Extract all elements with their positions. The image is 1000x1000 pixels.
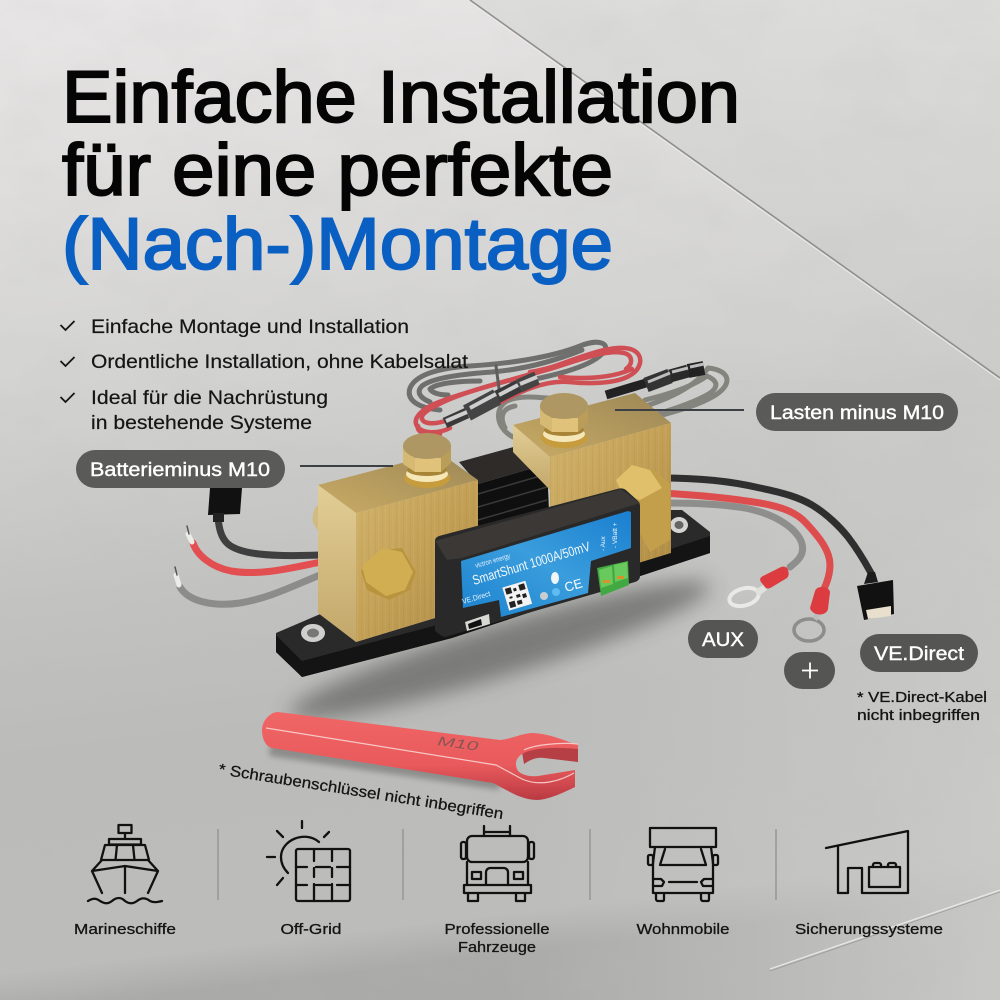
- hex bolt, front: [361, 548, 416, 600]
- terminal labels: - Aux: [600, 535, 607, 551]
- product name: SmartShunt 1000A/50mV: [471, 539, 592, 588]
- crimp ring terminals: [727, 567, 894, 641]
- label pill: plus: [784, 652, 835, 689]
- ring terminal: AUX: [727, 567, 789, 609]
- icon: Wohnmobile: [648, 828, 718, 901]
- label pill: Lasten minus M10: Lasten minus M10: [770, 403, 944, 424]
- SmartShunt housing: - VBatt +: [612, 522, 619, 548]
- blue label: [461, 511, 631, 617]
- item: Ideal für die Nachrüstung: Ideal für die Nachrüstung: [91, 387, 328, 409]
- hex bolt, right side: [616, 465, 670, 552]
- left VE.Direct plug: [208, 488, 242, 522]
- label pill: AUX: [688, 620, 758, 658]
- application icons: [88, 821, 908, 903]
- heat sink fins: [459, 443, 550, 555]
- footnote: VE.Direct cable: nicht inbegriffen: [857, 708, 980, 724]
- icon: Marineschiffe: [88, 825, 162, 903]
- application labels: Fahrzeuge: [458, 939, 536, 956]
- icon: Professionelle Fahrzeuge: [461, 826, 534, 901]
- application labels: Wohnmobile: [636, 921, 730, 938]
- divider: [775, 829, 777, 900]
- brass block right: [513, 393, 671, 590]
- bolt left: [403, 433, 451, 488]
- icon: Off-Grid: [267, 821, 350, 901]
- soft floor shadow: [282, 561, 718, 739]
- CE mark: CE: [563, 575, 584, 595]
- divider: [589, 829, 591, 900]
- brass block left: [313, 453, 478, 642]
- victron logo text: victron energy: [475, 553, 511, 570]
- label pill: Batterieminus M10: Batterieminus M10: [90, 460, 270, 481]
- item: Einfache Montage: Einfache Montage und Installation: [91, 316, 409, 338]
- green connector: [597, 561, 629, 596]
- right fuse holder: [606, 364, 704, 395]
- item: Ideal für die Nachrüstung: in bestehende Systeme: [91, 412, 312, 434]
- right side cables: [660, 478, 871, 591]
- leader line: Lasten minus: [615, 409, 744, 411]
- QR code: [502, 581, 532, 611]
- application labels: Sicherungssysteme: [795, 921, 943, 938]
- application labels: [74, 921, 943, 956]
- title: Einfache Installation: [62, 57, 740, 138]
- title: (Nach-)Montage: [62, 204, 613, 285]
- label pill: AUX: AUX: [702, 630, 744, 651]
- item: Ideal für die Nachrüstung: [60, 387, 328, 434]
- application labels: Marineschiffe: [74, 921, 176, 938]
- item: Ordentliche Installation: Ordentliche Installation, ohne Kabelsalat: [91, 351, 469, 373]
- label pill: VE.Direct: VE.Direct: [874, 644, 965, 665]
- VE.Direct port: [461, 589, 492, 631]
- label pill: Batterieminus M10: [76, 450, 285, 488]
- icon: Sicherungssysteme: [826, 831, 908, 893]
- leader line: Batterieminus: [300, 465, 393, 467]
- status dots: [540, 572, 560, 600]
- wrench marking: M10: [437, 733, 480, 754]
- left fuse holder: [445, 377, 537, 423]
- footnote: VE.Direct cable: * VE.Direct-Kabel: [857, 690, 987, 706]
- ring terminal: plus: [794, 587, 830, 641]
- cable loops behind the shunt: [409, 342, 727, 437]
- checklist: [60, 316, 469, 434]
- base plate: [276, 510, 710, 677]
- application labels: Off-Grid: [280, 921, 342, 938]
- plug: VE.Direct: [857, 572, 894, 620]
- wrench: [262, 712, 578, 800]
- title: [62, 57, 740, 285]
- label pill: Lasten minus M10: [756, 393, 958, 431]
- VE.Direct port: VE.Direct: [461, 589, 492, 606]
- footnote: VE.Direct cable: [857, 690, 987, 724]
- left side cables: [175, 518, 321, 604]
- label pill: VE.Direct: [860, 634, 978, 672]
- divider: [402, 829, 404, 900]
- SmartShunt housing: [435, 488, 640, 637]
- footnote: wrench: * Schraubenschlüssel nicht inbegriffen: [217, 761, 504, 823]
- title: für eine perfekte: [62, 130, 613, 211]
- divider: [217, 829, 219, 900]
- bolt right: [540, 393, 588, 448]
- product: SmartShunt with cables: [175, 342, 894, 739]
- application labels: Professionelle: [444, 921, 550, 938]
